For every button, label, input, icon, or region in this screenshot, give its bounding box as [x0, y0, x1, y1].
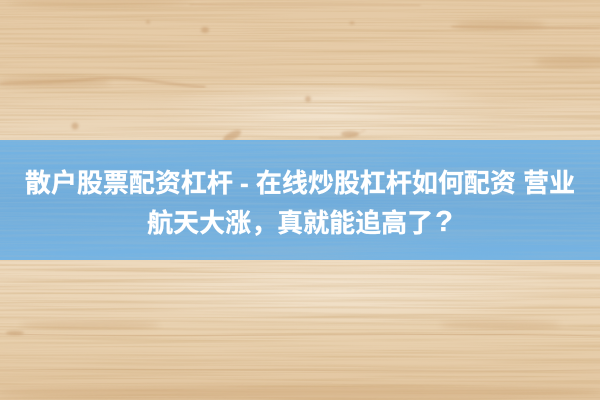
title line 1: 散户股票配资杠杆 - 在线炒股杠杆如何配资 营业: [25, 168, 575, 198]
title line 2: 航天大涨，真就能追高了?: [147, 206, 453, 238]
blue title banner: [0, 140, 600, 260]
